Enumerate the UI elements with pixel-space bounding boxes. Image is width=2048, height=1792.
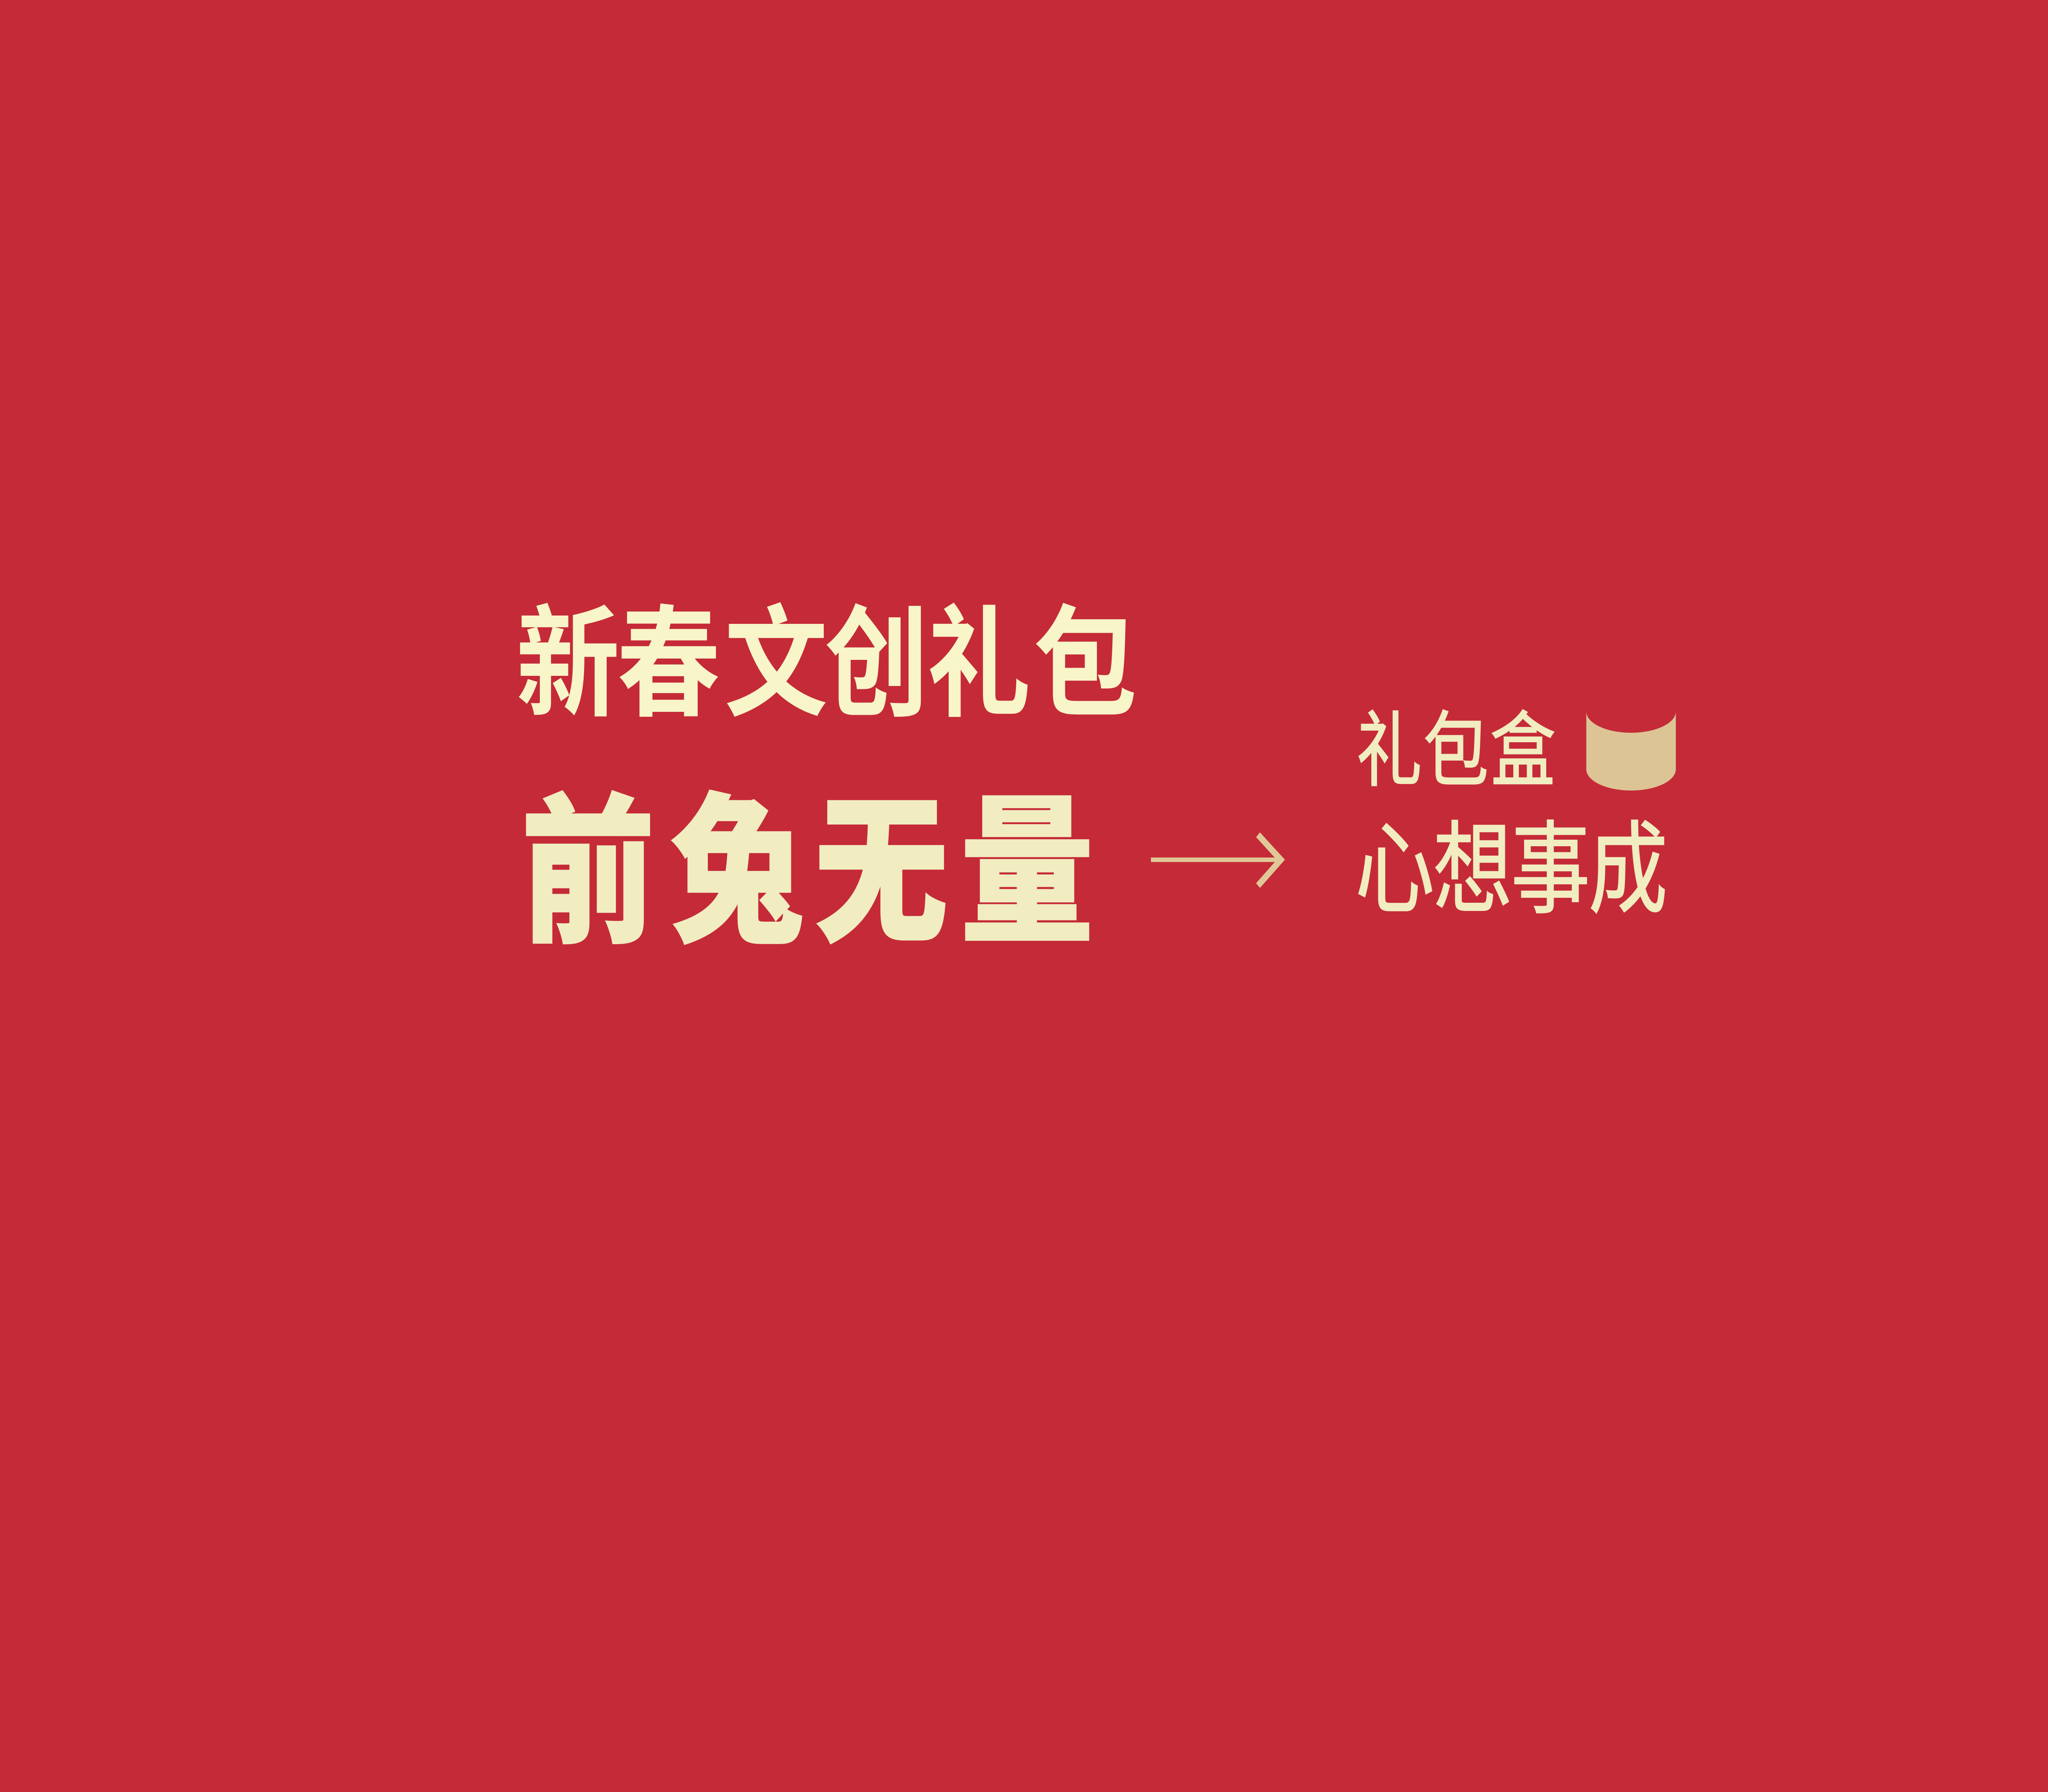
label: 心想事成: 心想事成 <box>1355 813 1667 926</box>
label: 礼包盒: 礼包盒 <box>1357 705 1556 797</box>
title: 新春文创礼包: 新春文创礼包 <box>516 597 1137 732</box>
arrow <box>1151 835 1281 886</box>
headline: 前兔无量: 前兔无量 <box>521 784 1094 963</box>
icon: gift box cylinder <box>1586 711 1676 791</box>
